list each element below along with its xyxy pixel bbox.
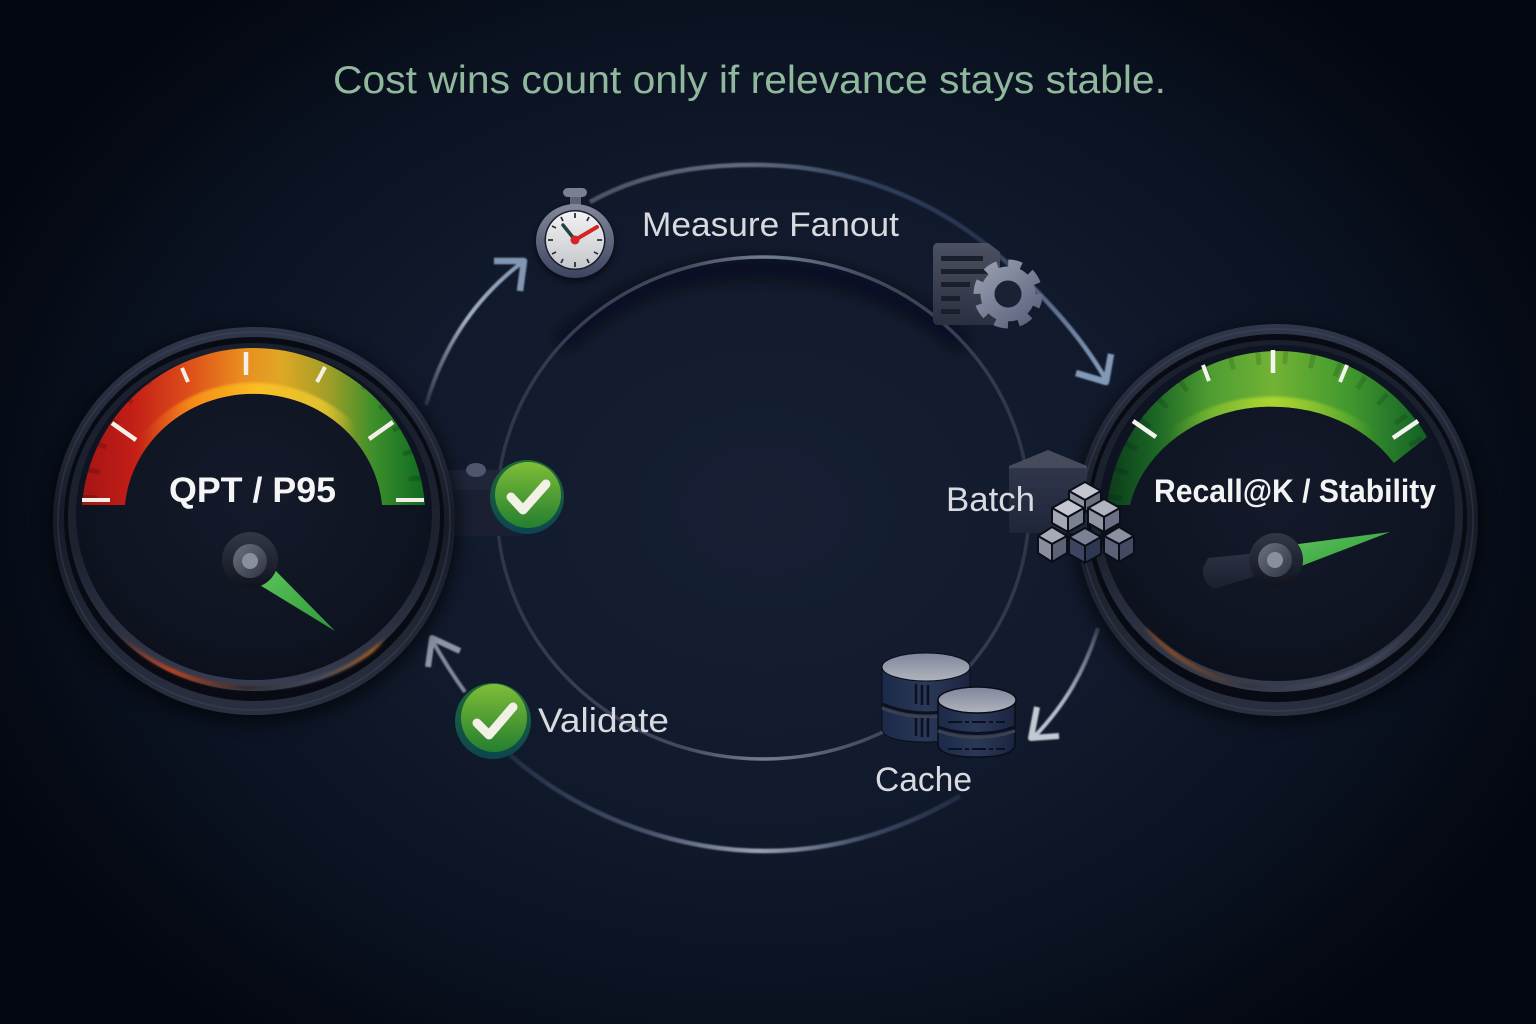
gauge bezel [1071, 324, 1483, 723]
cubes [1038, 482, 1134, 563]
scale ticks [1133, 350, 1418, 438]
outer arc: gauge to measure step [426, 261, 524, 405]
label: Cache: Cache [875, 761, 972, 799]
gauge label: QPT / P95 [169, 471, 336, 510]
outer arc: top, leading to recall gauge [590, 165, 1111, 382]
arrowhead: to cache [1031, 707, 1059, 738]
gauge lower reflection [116, 632, 392, 688]
icon: gear [978, 264, 1038, 324]
arrowhead: into recall gauge [1076, 354, 1111, 382]
icon: document with gear [933, 243, 1038, 325]
arrowhead: to QPT gauge [428, 638, 460, 667]
scale band: green [1107, 351, 1427, 505]
label: Batch: Batch [946, 481, 1035, 519]
gauge: Recall@K / Stability [1071, 324, 1483, 723]
outer arc: bottom [510, 755, 960, 851]
gauge lower reflection [1145, 628, 1410, 688]
scale band: red to green [82, 339, 425, 505]
title: Cost wins count only if relevance stays stable. [333, 59, 1166, 102]
label: Measure Fanout: Measure Fanout [642, 206, 900, 244]
small cylinder [938, 687, 1016, 757]
icon: check badge on QPT gauge [490, 460, 564, 534]
large cylinder [882, 653, 970, 742]
label: Validate: Validate [538, 702, 669, 740]
arrowhead: to stopwatch [494, 261, 524, 291]
icon: stopwatch [535, 188, 615, 282]
icon: validate check badge [455, 683, 531, 759]
scale ticks [82, 352, 424, 500]
gauge label: Recall@K / Stability [1154, 473, 1436, 509]
icon: database cache [882, 653, 1016, 757]
needle tail [1203, 553, 1262, 589]
gauge: QPT / P95 [48, 327, 460, 724]
needle hub [1249, 533, 1303, 587]
gauge bezel [48, 327, 460, 724]
needle [258, 565, 335, 631]
outer arc: validate to QPT gauge [428, 638, 465, 692]
camera bracket behind left check [448, 463, 522, 536]
icon: batch box with cubes [1009, 450, 1134, 563]
outer arc: recall gauge to cache [1031, 628, 1098, 738]
inner cycle ring [497, 257, 1029, 759]
needle [1291, 532, 1390, 568]
needle hub [222, 532, 278, 588]
